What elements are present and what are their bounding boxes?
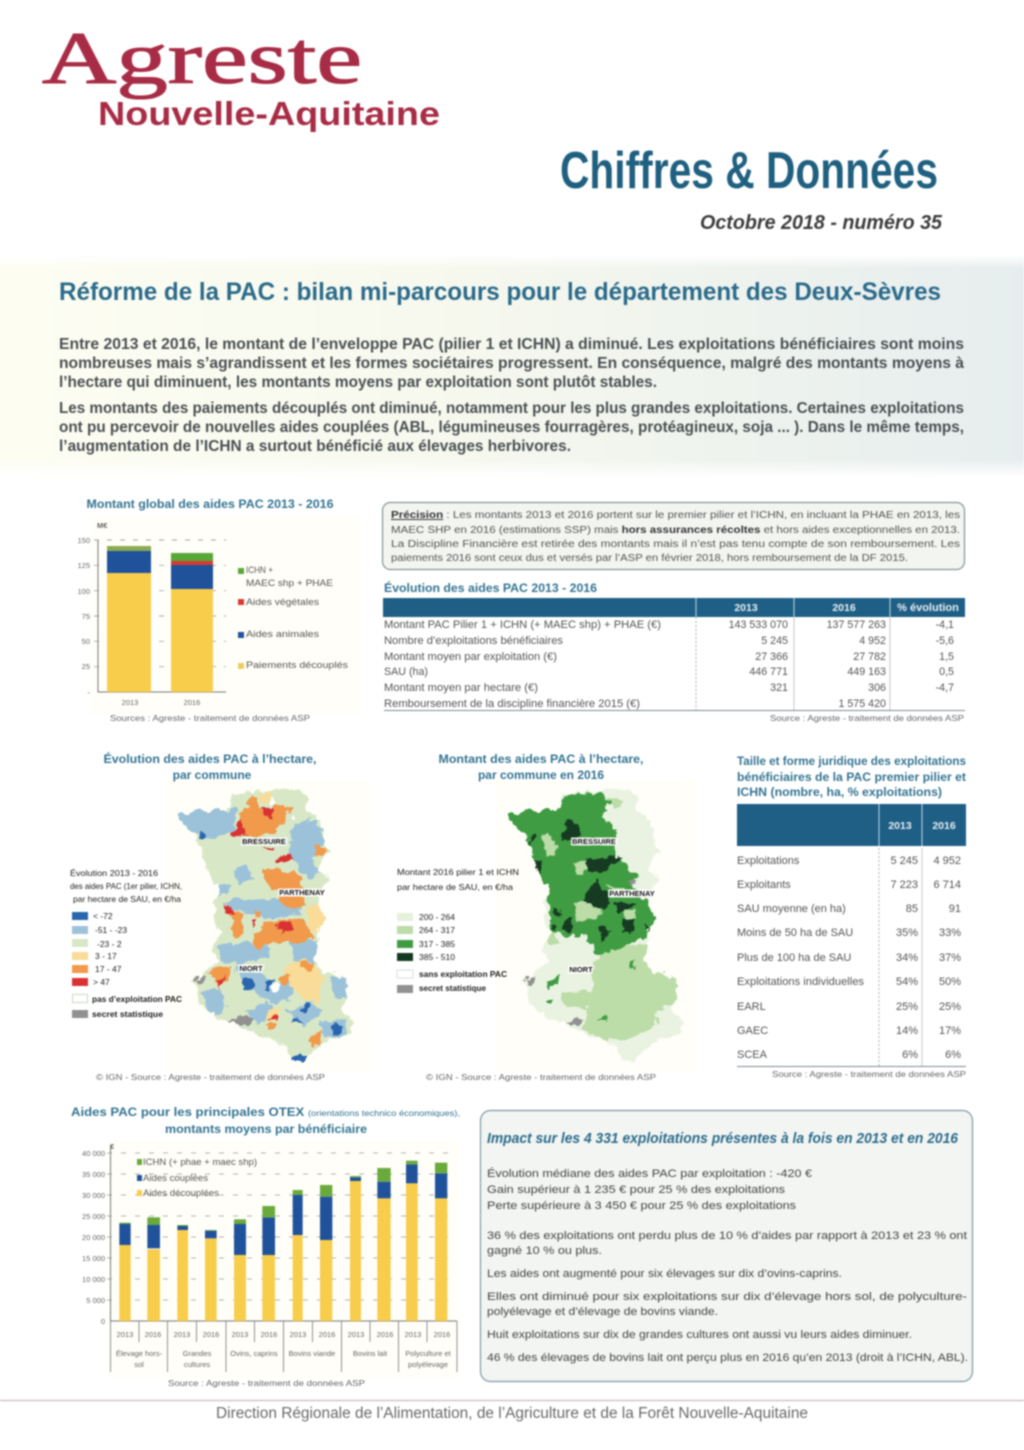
table header: 2013 bbox=[888, 820, 912, 832]
legend: Aides couplées bbox=[143, 1173, 208, 1184]
table rows: 4 952 bbox=[933, 855, 961, 867]
impact figures bbox=[487, 1167, 813, 1212]
table rows: 6 714 bbox=[933, 879, 961, 891]
category axis: 2016 bbox=[377, 1330, 393, 1339]
legend bbox=[137, 1157, 257, 1199]
panel: carte montant des aides bbox=[397, 752, 695, 1082]
table rows: 35% bbox=[896, 927, 918, 939]
y axis and labels: 25 bbox=[82, 662, 90, 671]
source: © IGN - Source : Agreste - traitement de données ASP bbox=[96, 1072, 325, 1082]
y axis labels: 35 000 bbox=[82, 1170, 105, 1179]
callout: précision: MAEC SHP en 2016 (estimations SSP) mais hors assurances récoltes et hors aides exceptionnelles en 2013. bbox=[391, 525, 960, 536]
main heading: Réforme de la PAC : bilan mi-parcours pour le département des Deux-Sèvres bbox=[59, 278, 941, 306]
intro text: nombreuses mais s’agrandissent et les formes sociétaires progressent. En conséquence, malgré des montants moyens à bbox=[59, 355, 964, 372]
table rows: 0,5 bbox=[939, 666, 954, 678]
stacked bar 2013 bbox=[107, 546, 151, 692]
gridlines and axis bbox=[107, 1145, 457, 1321]
table rows: 6% bbox=[945, 1049, 961, 1061]
heading: montants moyens par bénéficiaire bbox=[165, 1122, 367, 1136]
callout: précision bbox=[382, 502, 964, 570]
table rows: 143 533 070 bbox=[729, 619, 788, 631]
panel: carte évolution des aides bbox=[70, 751, 370, 1082]
map legend: 17 - 47 bbox=[95, 964, 122, 974]
table rows: GAEC bbox=[737, 1025, 768, 1037]
y axis labels: 30 000 bbox=[82, 1191, 105, 1200]
table rows: 5 245 bbox=[890, 855, 918, 867]
stacked bar 2016 bbox=[171, 553, 213, 692]
impact commentary: gagné 10 % ou plus. bbox=[487, 1245, 602, 1257]
source: Source : Agreste - traitement de données ASP bbox=[772, 1069, 966, 1079]
table rows: Exploitations individuelles bbox=[737, 976, 864, 988]
legend: Aides découplées bbox=[143, 1188, 219, 1199]
y axis and labels: M€ bbox=[97, 521, 108, 530]
table rows: 321 bbox=[770, 682, 788, 694]
table rows: Nombre d’exploitations bénéficiaires bbox=[384, 635, 563, 647]
category axis: 2016 bbox=[319, 1330, 335, 1339]
category axis: Grandes bbox=[183, 1349, 212, 1358]
y axis labels: 0 bbox=[101, 1317, 105, 1326]
choropleth map bbox=[173, 785, 357, 1068]
town labels: NIORT bbox=[569, 965, 593, 974]
category axis: 2016 bbox=[261, 1330, 277, 1339]
heading: Évolution des aides PAC à l’hectare, bbox=[104, 751, 316, 766]
panel: OTEX bar chart bbox=[71, 1105, 460, 1388]
table: évolution des aides PAC bbox=[383, 580, 965, 723]
town labels bbox=[569, 837, 655, 974]
table rows: 7 223 bbox=[890, 879, 918, 891]
impact commentary: Elles ont diminué pour six exploitations sur dix d’élevage hors sol, de polyculture- bbox=[487, 1291, 967, 1303]
map legend: 385 - 510 bbox=[419, 952, 455, 962]
table rows: SAU moyenne (en ha) bbox=[737, 903, 846, 915]
impact figures: Évolution médiane des aides PAC par exploitation : -420 € bbox=[487, 1167, 813, 1180]
table rows: 1 575 420 bbox=[838, 698, 886, 710]
legend bbox=[238, 565, 348, 671]
y axis labels: € bbox=[110, 1142, 115, 1151]
x labels: 2016 bbox=[184, 698, 200, 707]
heading: Évolution des aides PAC 2013 - 2016 bbox=[384, 580, 597, 595]
y axis labels: 20 000 bbox=[82, 1233, 105, 1242]
table rows: Exploitations bbox=[737, 855, 800, 867]
callout: précision: Précision : Les montants 2013 et 2016 portent sur le premier pilier et l’ICHN, en incluant la PHAE en 2013, les bbox=[391, 510, 960, 521]
impact figures: Perte supérieure à 3 450 € pour 25 % des exploitations bbox=[487, 1200, 796, 1212]
table rows: Montant PAC Pilier 1 + ICHN (+ MAEC shp) + PHAE (€) bbox=[384, 619, 661, 631]
intro text: Entre 2013 et 2016, le montant de l’enveloppe PAC (pilier 1 et ICHN) a diminué. Les exploitations bénéficiaires sont moins bbox=[59, 336, 964, 353]
table rows: 34% bbox=[896, 952, 918, 964]
legend: ICHN (+ phae + maec shp) bbox=[143, 1157, 257, 1168]
category axis: sol bbox=[134, 1360, 144, 1369]
heading: montant global: Montant global des aides PAC 2013 - 2016 bbox=[86, 497, 334, 511]
heading: Montant des aides PAC à l’hectare, bbox=[438, 752, 644, 766]
map legend bbox=[70, 868, 182, 1019]
category axis: cultures bbox=[184, 1360, 210, 1369]
town labels: PARTHENAY bbox=[609, 889, 655, 898]
table rows bbox=[737, 855, 961, 1061]
table rows: SAU (ha) bbox=[384, 666, 428, 678]
impact heading: Impact sur les 4 331 exploitations présentes à la fois en 2013 et en 2016 bbox=[487, 1131, 959, 1147]
category axis: 2013 bbox=[232, 1330, 248, 1339]
table rows: 91 bbox=[949, 903, 961, 915]
y axis and labels: - bbox=[88, 688, 90, 697]
table rows: 25% bbox=[939, 1001, 961, 1013]
y axis and labels: 50 bbox=[82, 637, 90, 646]
x labels: 2013 bbox=[122, 698, 138, 707]
table rows: Montant moyen par hectare (€) bbox=[384, 682, 538, 694]
town labels: NIORT bbox=[239, 964, 263, 973]
table header: 2016 bbox=[832, 602, 856, 614]
heading: par commune en 2016 bbox=[478, 768, 604, 782]
category axis: 2013 bbox=[405, 1330, 421, 1339]
map legend: -51 - -23 bbox=[95, 925, 127, 935]
map legend bbox=[397, 867, 519, 993]
y axis and labels: 150 bbox=[77, 536, 90, 545]
table header: 2016 bbox=[932, 820, 956, 832]
y axis labels bbox=[82, 1142, 115, 1326]
legend: Paiements découplés bbox=[246, 660, 348, 671]
table rows: 1,5 bbox=[939, 651, 954, 663]
table header: % évolution bbox=[897, 602, 959, 614]
category axis: 2016 bbox=[434, 1330, 450, 1339]
table rows: 85 bbox=[906, 903, 918, 915]
town labels: BRESSUIRE bbox=[242, 837, 286, 846]
map legend: Montant 2016 pilier 1 et ICHN bbox=[397, 867, 519, 877]
table rows: Plus de 100 ha de SAU bbox=[737, 952, 851, 964]
heading: ICHN (nombre, ha, % exploitations) bbox=[737, 785, 942, 799]
table rows: Remboursement de la discipline financière 2015 (€) bbox=[384, 698, 640, 710]
stacked bars bbox=[119, 1161, 447, 1321]
map legend: par hectare de SAU, en €/ha bbox=[397, 882, 513, 892]
impact commentary: polyélevage et d’élevage de bovins viande. bbox=[487, 1306, 718, 1318]
table rows: 6% bbox=[902, 1049, 918, 1061]
category axis: 2013 bbox=[174, 1330, 190, 1339]
table rows: Exploitants bbox=[737, 879, 791, 891]
map legend: par hectare de SAU, en €/ha bbox=[73, 894, 181, 904]
map legend: secret statistique bbox=[92, 1009, 163, 1019]
category axis: 2016 bbox=[203, 1330, 219, 1339]
category axis bbox=[110, 1321, 457, 1372]
source: Sources : Agreste - traitement de données ASP bbox=[110, 713, 310, 723]
intro text: ont pu percevoir de nouvelles aides couplées (ABL, légumineuses fourragères, protéagineux, soja ... ). Dans le même temps, bbox=[59, 419, 964, 436]
callout: précision: paiements 2016 sont ceux dus et versés par l’ASP en février 2018, hors remboursement de la DF 2015. bbox=[391, 553, 908, 564]
category axis: Bovins viande bbox=[289, 1349, 335, 1358]
source: Source : Agreste - traitement de données ASP bbox=[770, 713, 964, 723]
table rows: 33% bbox=[939, 927, 961, 939]
impact commentary: 36 % des exploitations ont perdu plus de 10 % d’aides par rapport à 2013 et 23 % ont bbox=[487, 1230, 968, 1242]
category axis: Polyculture et bbox=[405, 1349, 452, 1358]
town labels: BRESSUIRE bbox=[572, 837, 616, 846]
heading bbox=[737, 754, 966, 799]
map legend: 264 - 317 bbox=[419, 925, 455, 935]
table header: 2013 bbox=[734, 602, 758, 614]
legend: ICHN + bbox=[246, 565, 273, 576]
logo: Agreste Nouvelle-Aquitaine bbox=[42, 18, 440, 132]
logo: Agreste Nouvelle-Aquitaine: Agreste bbox=[42, 18, 362, 100]
heading bbox=[71, 1105, 460, 1136]
map legend: pas d’exploitation PAC bbox=[92, 994, 182, 1004]
map legend: < -72 bbox=[93, 911, 113, 921]
category axis: 2013 bbox=[117, 1330, 133, 1339]
y axis labels: 5 000 bbox=[86, 1296, 105, 1305]
map legend: sans exploitation PAC bbox=[419, 969, 507, 979]
y axis labels: 25 000 bbox=[82, 1212, 105, 1221]
category axis: 2013 bbox=[290, 1330, 306, 1339]
table rows: SCEA bbox=[737, 1049, 768, 1061]
legend: MAEC shp + PHAE bbox=[246, 578, 333, 589]
impact commentary: Huit exploitations sur dix de grandes cultures ont aussi vu leurs aides diminuer. bbox=[487, 1329, 912, 1341]
heading bbox=[438, 752, 644, 782]
map legend: des aides PAC (1er pilier, ICHN, bbox=[70, 881, 182, 891]
legend: Aides végétales bbox=[246, 597, 319, 608]
callout: précision: La Discipline Financière est retirée des montants mais il n’est pas tenu compte de son remboursement. Les bbox=[391, 539, 960, 550]
table rows bbox=[384, 619, 954, 710]
category axis: Élevage hors- bbox=[116, 1349, 163, 1358]
category axis: 2016 bbox=[145, 1330, 161, 1339]
legend: Aides animales bbox=[246, 629, 319, 640]
town labels bbox=[239, 837, 325, 973]
table rows: -4,7 bbox=[936, 682, 954, 694]
table rows: -4,1 bbox=[936, 619, 954, 631]
table rows: 306 bbox=[868, 682, 886, 694]
impact commentary: Les aides ont augmenté pour six élevages sur dix d’ovins-caprins. bbox=[487, 1268, 842, 1280]
town labels: PARTHENAY bbox=[279, 888, 325, 897]
impact figures: Gain supérieur à 1 235 € pour 25 % des exploitations bbox=[487, 1184, 785, 1196]
intro text: Les montants des paiements découplés ont diminué, notamment pour les plus grandes exploitations. Certaines exploitations bbox=[59, 400, 964, 417]
intro background band bbox=[0, 255, 1024, 477]
map legend: 317 - 385 bbox=[419, 939, 455, 949]
category axis: polyélevage bbox=[408, 1360, 448, 1369]
issue date: Octobre 2018 - numéro 35 bbox=[700, 212, 943, 234]
panel: montant global bar chart bbox=[77, 497, 360, 723]
table rows: 54% bbox=[896, 976, 918, 988]
table header bbox=[737, 804, 966, 846]
x labels bbox=[122, 698, 200, 707]
table rows: EARL bbox=[737, 1001, 766, 1013]
y axis labels: 15 000 bbox=[82, 1254, 105, 1263]
y axis labels: 10 000 bbox=[82, 1275, 105, 1284]
table rows: -5,6 bbox=[936, 635, 954, 647]
panel: impact bbox=[480, 1110, 972, 1382]
choropleth map bbox=[503, 785, 687, 1068]
source: Source : Agreste - traitement de données ASP bbox=[168, 1378, 365, 1388]
map legend: -23 - 2 bbox=[97, 939, 122, 949]
category axis: 2013 bbox=[348, 1330, 364, 1339]
table: taille et forme juridique bbox=[737, 754, 966, 1079]
table rows: 446 771 bbox=[749, 666, 788, 678]
table rows: 27 366 bbox=[755, 651, 788, 663]
table rows: 449 163 bbox=[847, 666, 886, 678]
heading: Taille et forme juridique des exploitations bbox=[737, 754, 966, 768]
impact commentary: 46 % des élevages de bovins lait ont perçu plus en 2016 qu’en 2013 (droit à l’ICHN, ABL). bbox=[487, 1352, 968, 1364]
table rows: 27 782 bbox=[853, 651, 886, 663]
heading bbox=[104, 751, 316, 782]
table rows: 17% bbox=[939, 1025, 961, 1037]
heading: Aides PAC pour les principales OTEX (orientations technico économiques), bbox=[71, 1105, 460, 1119]
table rows: 37% bbox=[939, 952, 961, 964]
table rows: 50% bbox=[939, 976, 961, 988]
impact commentary bbox=[487, 1230, 968, 1364]
logo: Agreste Nouvelle-Aquitaine: Nouvelle-Aquitaine bbox=[98, 95, 440, 132]
table header bbox=[383, 598, 965, 617]
y axis and labels bbox=[77, 521, 226, 697]
map legend: Évolution 2013 - 2016 bbox=[70, 868, 158, 878]
map legend: > 47 bbox=[93, 977, 110, 987]
map legend: 3 - 17 bbox=[95, 951, 117, 961]
footer: Direction Régionale de l’Alimentation, de l’Agriculture et de la Forêt Nouvelle-Aquitaine bbox=[216, 1405, 808, 1422]
map legend: secret statistique bbox=[419, 983, 486, 993]
intro text bbox=[59, 336, 964, 455]
heading: par commune bbox=[173, 768, 252, 782]
table rows: 4 952 bbox=[859, 635, 886, 647]
table rows: 5 245 bbox=[761, 635, 788, 647]
table rows: 14% bbox=[896, 1025, 918, 1037]
table rows: Montant moyen par exploitation (€) bbox=[384, 651, 557, 663]
table rows: 25% bbox=[896, 1001, 918, 1013]
y axis and labels: 125 bbox=[77, 561, 90, 570]
category axis: Ovins, caprins bbox=[230, 1349, 278, 1358]
table rows: 137 577 263 bbox=[827, 619, 886, 631]
intro text: l’hectare qui diminuent, les montants moyens par exploitation sont plutôt stables. bbox=[59, 374, 657, 391]
y axis and labels: 75 bbox=[82, 612, 90, 621]
source: © IGN - Source : Agreste - traitement de données ASP bbox=[426, 1072, 656, 1082]
y axis labels: 40 000 bbox=[82, 1149, 105, 1158]
category axis: Bovins lait bbox=[353, 1349, 388, 1358]
intro text: l’augmentation de l’ICHN a surtout bénéficié aux élevages herbivores. bbox=[59, 438, 571, 455]
y axis and labels: 100 bbox=[77, 587, 90, 596]
heading: bénéficiaires de la PAC premier pilier et bbox=[737, 770, 966, 784]
map legend: 200 - 264 bbox=[419, 912, 455, 922]
table rows: Moins de 50 ha de SAU bbox=[737, 927, 853, 939]
